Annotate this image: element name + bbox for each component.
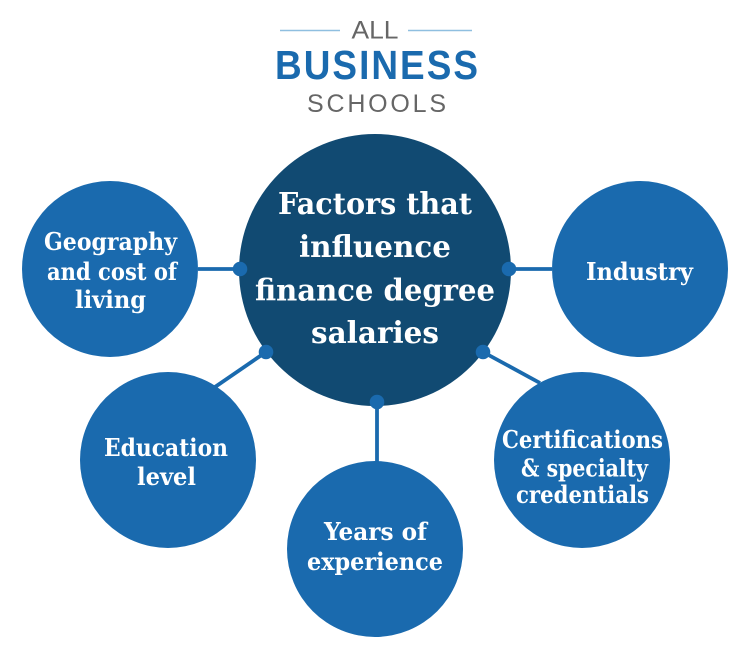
connector: industry [509,267,552,271]
node: industry [552,181,728,357]
node: certifications: Certifications [502,425,663,454]
logo: BUSINESS [275,43,478,88]
center circle: salaries [311,316,439,351]
node: education: Education [104,433,228,462]
logo: ALL [352,16,399,44]
node: education [80,372,256,548]
logo: SCHOOLS [307,90,446,118]
node: certifications [494,372,670,548]
node: education: level [137,462,196,491]
node: geography [22,181,198,357]
connector: certifications [483,352,540,383]
node: experience: Years of [323,517,429,546]
node: certifications: & specialty [521,454,649,482]
center circle: Factors that [278,187,472,222]
node: geography: and cost of [47,257,178,286]
connector: geography [198,267,240,271]
node: geography: living [75,285,146,314]
node: industry: Industry [586,257,694,286]
node: geography: Geography [44,227,178,256]
node: experience [287,461,463,637]
center circle: influence [299,230,451,265]
node: certifications: credentials [516,480,649,509]
connector: education [215,352,266,387]
logo [275,16,478,118]
connector: experience [375,402,379,462]
center circle: finance degree [255,274,495,308]
node: experience: experience [307,547,443,576]
center circle [233,134,516,409]
